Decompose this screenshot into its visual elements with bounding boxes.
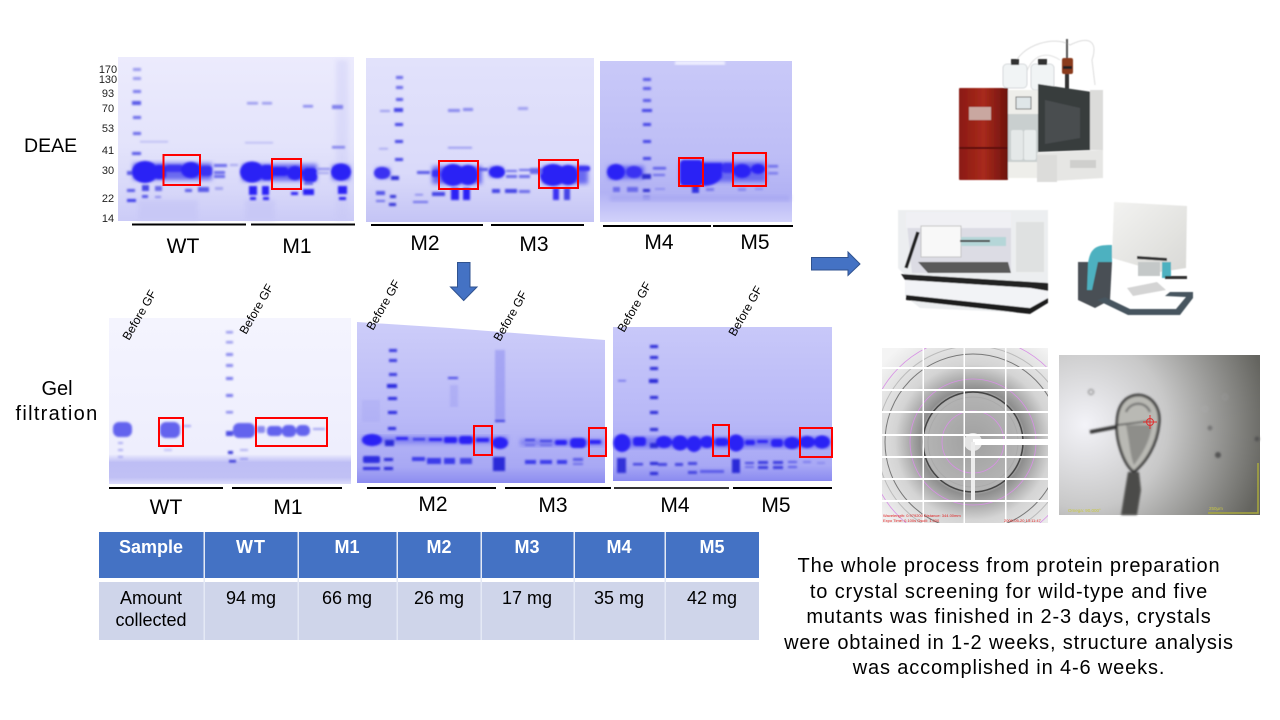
table data row: 35 mg	[594, 588, 644, 608]
image: chromatography system	[959, 39, 1103, 182]
molecular weight labels: 70	[102, 103, 114, 115]
table data row: 26 mg	[414, 588, 464, 608]
table header row	[119, 537, 725, 557]
sample labels: M5	[761, 494, 791, 517]
sample bars	[109, 224, 832, 489]
gel: gel filtration M2 and M3	[357, 322, 605, 483]
molecular weight labels: 53	[102, 123, 114, 135]
table data row: collected	[115, 610, 187, 630]
table header row: M5	[699, 537, 725, 557]
sample labels: WT	[150, 496, 182, 519]
table data row: 66 mg	[322, 588, 372, 608]
label: Gel filtration: Gel	[41, 378, 73, 400]
table header row: Sample	[119, 537, 183, 557]
table header row: M1	[334, 537, 360, 557]
table header row: M3	[514, 537, 540, 557]
gel: gel filtration WT and M1	[109, 318, 351, 484]
image: crystal photograph	[1059, 355, 1260, 515]
sample labels: M3	[538, 494, 568, 517]
molecular weight labels: 93	[102, 88, 114, 100]
Before GF labels	[119, 278, 765, 344]
image: diffraction pattern: Expo Time: 0.100s Oscill: 1.000	[883, 518, 940, 523]
label: Gel filtration	[15, 378, 99, 425]
molecular weight labels: 170	[99, 64, 117, 76]
table: amount collected	[99, 532, 759, 640]
arrow: right	[812, 252, 860, 276]
table header row: WT	[236, 537, 266, 557]
image: diffraction pattern: Wavelength: 0.979200 Distance: 344.00mm	[883, 513, 961, 518]
sample labels: M4	[644, 231, 674, 254]
gel: gel filtration M4 and M5	[613, 327, 832, 481]
text block: process summary: mutants was finished in 2-3 days, crystals	[806, 606, 1212, 628]
label: Gel filtration: filtration	[15, 403, 99, 425]
molecular weight labels: 41	[102, 145, 114, 157]
Before GF labels: Before GF	[725, 284, 765, 338]
sample labels: M3	[519, 233, 549, 256]
Before GF labels: Before GF	[236, 282, 276, 336]
sample labels: M2	[410, 232, 440, 255]
text block: process summary: to crystal screening for wild-type and five	[810, 581, 1208, 603]
arrow: down	[450, 262, 477, 300]
table header row: M2	[426, 537, 452, 557]
table data row: 17 mg	[502, 588, 552, 608]
text block: process summary: was accomplished in 4-6 weeks.	[852, 657, 1165, 679]
table header row: M4	[606, 537, 632, 557]
image: crystal photograph: 250μm	[1209, 506, 1223, 511]
table data row: 94 mg	[226, 588, 276, 608]
sample labels: M1	[273, 496, 303, 519]
Before GF labels: Before GF	[119, 288, 159, 342]
molecular weight labels: 22	[102, 193, 114, 205]
text block: process summary: The whole process from protein preparation	[798, 555, 1220, 577]
sample labels: M2	[418, 493, 448, 516]
image: drop dispenser	[1078, 202, 1193, 315]
gel: DEAE WT and M1	[118, 57, 354, 221]
sample labels	[150, 231, 791, 519]
Before GF labels: Before GF	[490, 289, 530, 344]
molecular weight labels	[99, 64, 117, 225]
table data row	[115, 588, 737, 630]
sample labels: WT	[167, 235, 199, 258]
molecular weight labels: 14	[102, 213, 114, 225]
text block: process summary	[783, 555, 1234, 679]
red highlight boxes	[159, 153, 832, 457]
sample labels: M1	[282, 235, 312, 258]
gel: DEAE M2 and M3	[366, 58, 594, 222]
sample labels: M5	[740, 231, 770, 254]
Before GF labels: Before GF	[614, 280, 654, 334]
gel: DEAE M4 and M5	[600, 61, 792, 222]
molecular weight labels: 130	[99, 74, 117, 86]
sample labels: M4	[660, 494, 690, 517]
label: DEAE: DEAE	[24, 135, 77, 157]
text block: process summary: were obtained in 1-2 weeks, structure analysis	[783, 632, 1234, 654]
table data row: Amount	[120, 588, 182, 608]
Before GF labels: Before GF	[363, 278, 403, 332]
table data row: 42 mg	[687, 588, 737, 608]
molecular weight labels: 30	[102, 165, 114, 177]
image: crystallization robot	[898, 210, 1048, 314]
image: diffraction pattern	[882, 348, 1048, 523]
image: crystal photograph: Omega: 90.000°	[1068, 508, 1101, 513]
image: diffraction pattern: 2009-05-20 13:11:47	[1004, 518, 1042, 523]
